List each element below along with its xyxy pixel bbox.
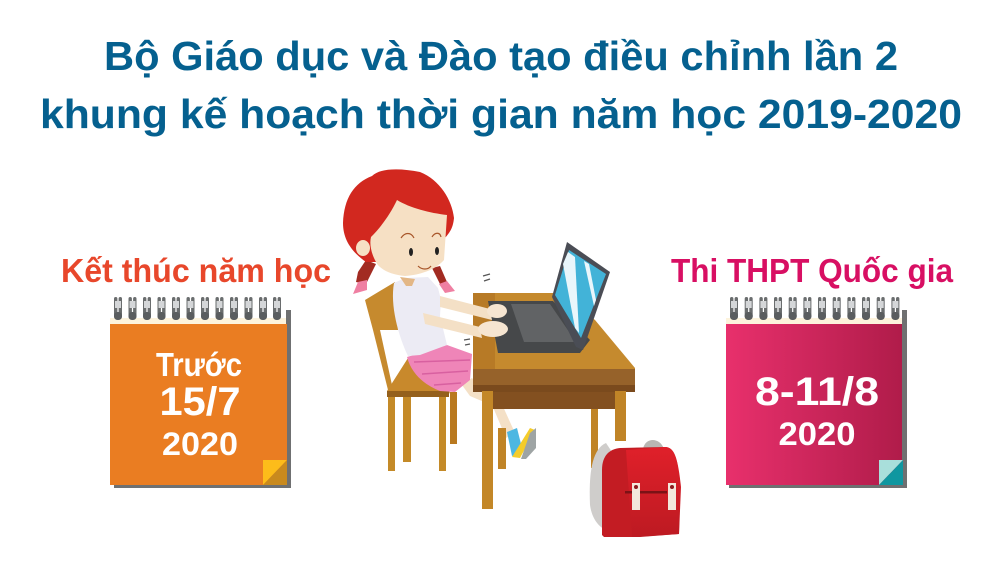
desk xyxy=(473,293,635,509)
hands xyxy=(487,304,507,318)
calendar date text: 8-11/8 xyxy=(755,370,879,414)
illustration: girl at desk xyxy=(343,169,681,537)
calendar date text: Trước xyxy=(156,346,242,383)
laptop xyxy=(488,242,610,353)
face xyxy=(370,200,447,276)
motion marks xyxy=(464,274,490,345)
calendar: school year end xyxy=(110,297,291,488)
heading: school year end: Kết thúc năm học xyxy=(61,252,331,289)
calendar rings xyxy=(114,297,281,320)
heading: national exam: Thi THPT Quốc gia xyxy=(671,252,954,289)
hair back xyxy=(343,169,454,262)
braids xyxy=(356,260,376,284)
title: khung kế hoạch thời gian năm học 2019-2020 xyxy=(40,91,962,137)
calendar date text: 15/7 xyxy=(160,380,240,424)
arms xyxy=(440,296,492,320)
far leg and shoe xyxy=(462,378,536,459)
calendar: national exam xyxy=(726,297,907,488)
page fold xyxy=(263,460,287,485)
title: Bộ Giáo dục và Đào tạo điều chỉnh lần 2 xyxy=(104,33,898,79)
backpack xyxy=(590,440,681,537)
collar xyxy=(400,277,415,286)
desk legs back xyxy=(591,400,598,468)
page fold xyxy=(879,460,903,485)
eyes xyxy=(409,248,413,256)
ear xyxy=(356,240,370,256)
calendar date text: 2020 xyxy=(778,416,856,452)
shirt xyxy=(393,277,447,356)
eyebrows and mouth xyxy=(401,233,441,269)
skirt xyxy=(407,345,472,392)
calendar date text xyxy=(755,370,879,452)
calendar rings xyxy=(730,297,899,320)
calendar date text xyxy=(156,346,242,462)
title xyxy=(40,33,962,137)
chair xyxy=(365,282,457,471)
girl head xyxy=(343,169,455,294)
girl body xyxy=(393,277,508,392)
calendar date text: 2020 xyxy=(162,426,238,462)
